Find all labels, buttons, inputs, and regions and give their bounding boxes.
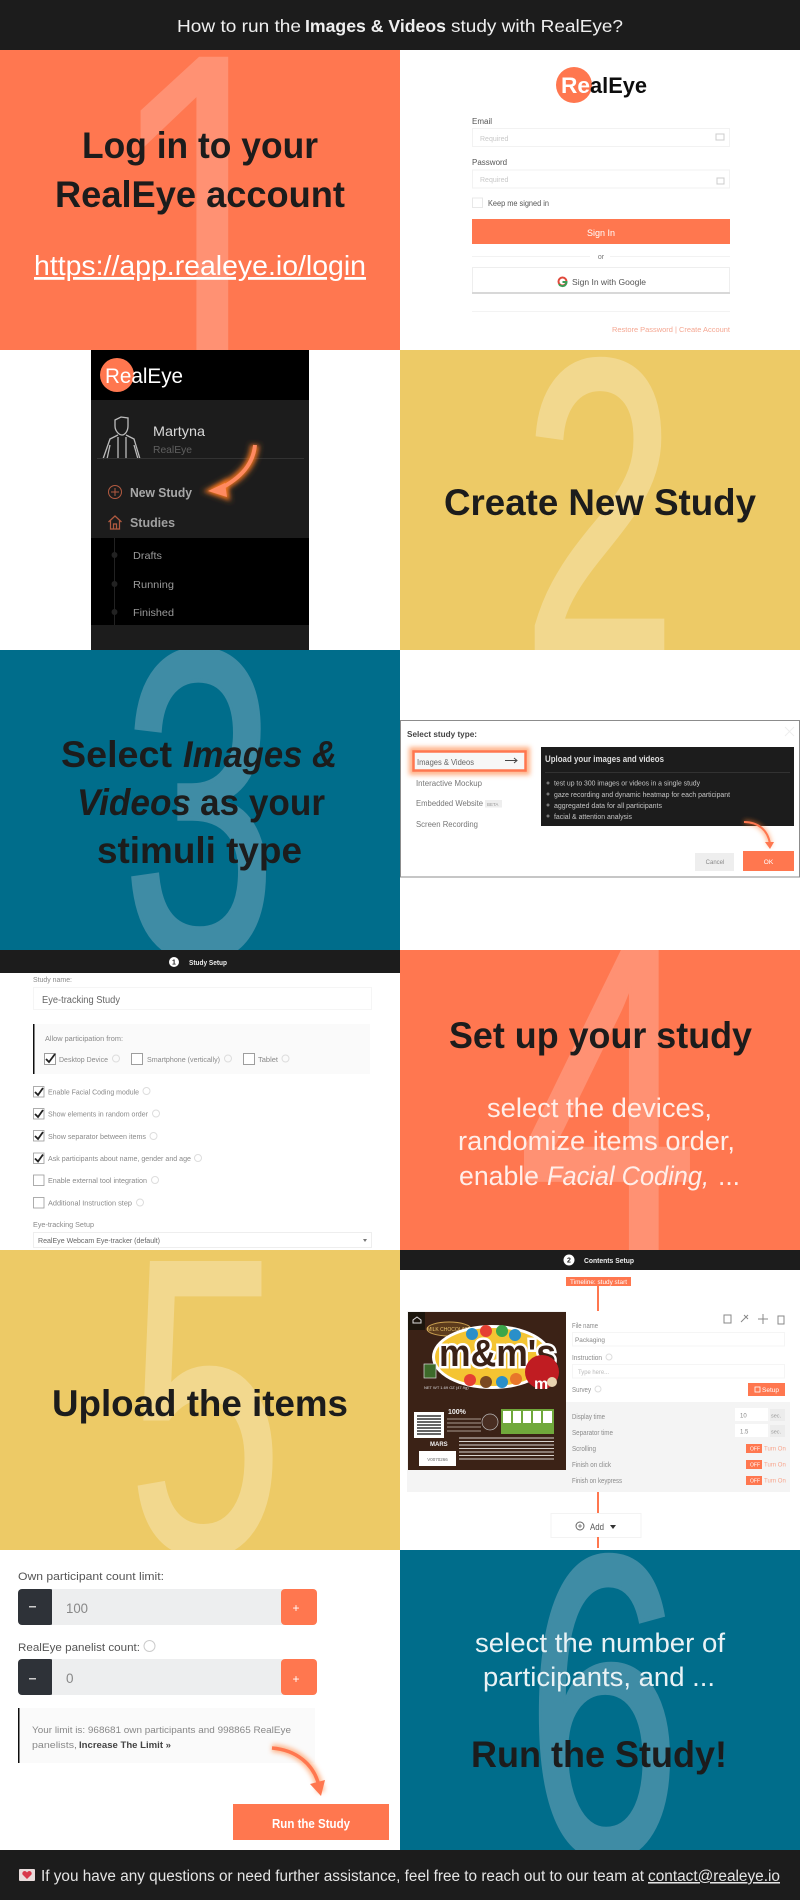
contents bar: Contents Setup [584, 1256, 634, 1265]
panel: step 2 create new study [400, 350, 800, 650]
modal [400, 720, 800, 877]
header bar [0, 0, 800, 50]
packaging image: MARS [430, 1442, 448, 1448]
file name field: File name [572, 1323, 598, 1330]
setup description: ... [718, 1161, 740, 1191]
device options [33, 1024, 370, 1074]
checkbox list: Show elements in random order [48, 1112, 149, 1118]
run button [233, 1804, 389, 1840]
study name field: Eye-tracking Study [42, 995, 120, 1006]
study name field: Study name: [33, 977, 72, 984]
file name field: Packaging [575, 1337, 605, 1344]
timing settings: Scrolling [572, 1446, 596, 1453]
setup bar: Study Setup [189, 960, 227, 967]
contact text: If you have any questions or need further assistance, feel free to reach out to our team at [41, 1868, 645, 1885]
setup description: enable [459, 1161, 539, 1191]
toggle switches: Turn On [764, 1446, 786, 1452]
checkbox list: Enable external tool integration [48, 1178, 147, 1185]
panelist stepper [18, 1640, 317, 1695]
description box: aggregated data for all participants [554, 803, 662, 810]
own participant stepper: Own participant count limit: [18, 1571, 164, 1583]
toggle switches: OFF [750, 1446, 760, 1452]
option: images and videos highlighted [412, 750, 527, 772]
timeline tag: Timeline: study start [570, 1280, 627, 1286]
arrow: to ok button [744, 822, 774, 849]
heading: select images and videos: Images & [183, 734, 337, 775]
google button [472, 268, 730, 294]
timing settings: Display time [572, 1414, 605, 1421]
sign in button [472, 219, 730, 244]
survey setup [572, 1383, 785, 1396]
RealEye logo [556, 67, 647, 103]
icon: love letter [19, 1869, 35, 1881]
heading: select images and videos: Videos [77, 782, 191, 823]
option list: Screen Recording [416, 820, 478, 829]
panel: participant count screenshot [0, 1550, 400, 1850]
menu: sub items [112, 538, 174, 625]
icon: user avatar [103, 417, 140, 459]
panel: contents setup screenshot [400, 1250, 800, 1550]
survey setup: Setup [762, 1387, 779, 1394]
panel: new study screenshot [0, 350, 400, 650]
description box: Upload your images and videos [545, 754, 664, 764]
option: images and videos highlighted: Images & Videos [417, 758, 474, 767]
account links: Restore Password | Create Account [612, 325, 731, 334]
device options: Desktop Device [59, 1057, 108, 1064]
heading: select images and videos: Select [61, 734, 172, 775]
packaging image [408, 1312, 566, 1470]
packaging image: m [534, 1376, 548, 1393]
big number 2: 2 [522, 273, 677, 742]
cancel button [695, 853, 734, 871]
panel: study setup screenshot [0, 950, 400, 1250]
study name field [33, 977, 372, 1010]
keep signed in [472, 198, 549, 208]
device options: Tablet [258, 1057, 278, 1064]
setup description: Facial Coding, [547, 1161, 709, 1191]
option list: Interactive Mockup [416, 779, 483, 788]
setup description [458, 1093, 740, 1191]
limit note [18, 1708, 315, 1763]
contact email: contact@realeye.io [648, 1868, 780, 1885]
timing settings: 1.5 [740, 1430, 749, 1436]
panel: login screenshot [400, 50, 800, 350]
nutrition panel [501, 1409, 554, 1434]
RealEye logo: alEye [590, 73, 647, 98]
heading: upload the items: Upload the items [52, 1383, 348, 1424]
barcode [414, 1412, 444, 1438]
heading: log in: Log in to your [82, 125, 318, 166]
sidebar: RealEye [153, 444, 192, 456]
ok button [743, 851, 794, 871]
modal title: Select study type: [407, 729, 477, 739]
own participant stepper: + [292, 1601, 300, 1615]
description box: facial & attention analysis [554, 814, 632, 821]
keep signed in: Keep me signed in [488, 199, 549, 208]
option list: BETA [487, 802, 498, 807]
footer bar [0, 1850, 800, 1900]
timing settings: sec. [771, 1430, 782, 1436]
own participant stepper [18, 1571, 317, 1625]
timeline tag [566, 1277, 631, 1311]
title [177, 16, 623, 36]
packaging image: MILK CHOCOLATE [427, 1327, 472, 1333]
timing settings: sec. [771, 1414, 782, 1420]
timing settings: Finish on keypress [572, 1478, 622, 1485]
toggle switches: Turn On [764, 1478, 786, 1484]
menu: studies [108, 516, 175, 530]
limit note: Increase The Limit » [79, 1740, 171, 1751]
checkbox list: Additional Instruction step [48, 1200, 132, 1208]
setup bar [0, 950, 400, 973]
login link: https://app.realeye.io/login [34, 250, 366, 281]
option list: Embedded Website [416, 799, 484, 808]
checkbox list: Enable Facial Coding module [48, 1090, 139, 1096]
limit note: Your limit is: 968681 own participants and 998865 RealEye [32, 1725, 291, 1736]
sidebar logo: RealEye [105, 365, 183, 388]
toolbar icons [724, 1314, 784, 1324]
google button: Sign In with Google [572, 277, 646, 287]
email field: Email [472, 117, 492, 126]
eye tracking setup select: RealEye Webcam Eye-tracker (default) [38, 1238, 160, 1245]
arrow: to run button [272, 1748, 325, 1796]
menu: sub items: Finished [133, 607, 174, 619]
heading: run the study: Run the Study! [471, 1734, 727, 1775]
device options: Smartphone (vertically) [147, 1057, 220, 1064]
participants description: participants, and ... [483, 1662, 715, 1692]
heading: log in [55, 125, 345, 215]
description box: test up to 300 images or videos in a single study [554, 780, 700, 788]
title: study with RealEye? [451, 16, 623, 36]
toggle switches: OFF [750, 1478, 760, 1484]
contents bar: 2 [567, 1258, 571, 1264]
menu: studies: Studies [130, 516, 175, 530]
sidebar logo [100, 358, 183, 392]
timing settings: Finish on click [572, 1462, 611, 1469]
heading: log in: RealEye account [55, 174, 345, 215]
big number 4: 4 [518, 844, 698, 1346]
checkbox list: Ask participants about name, gender and age [48, 1156, 191, 1163]
panel: step 5 upload items [0, 1250, 400, 1550]
timing settings: 10 [740, 1414, 747, 1420]
run button: Run the Study [272, 1816, 351, 1831]
ok button: OK [764, 859, 774, 866]
checkbox list: Show separator between items [48, 1134, 147, 1141]
option list [416, 779, 502, 829]
panelist stepper: + [292, 1672, 300, 1686]
survey setup: Survey [572, 1387, 591, 1394]
heading: create new study: Create New Study [444, 482, 756, 523]
description box: gaze recording and dynamic heatmap for each participant [554, 792, 730, 799]
participants description [475, 1628, 726, 1692]
menu: sub items: Running [133, 579, 174, 591]
heading: set up your study: Set up your study [449, 1015, 752, 1056]
instruction field: Type here... [578, 1370, 609, 1376]
setup description: randomize items order, [458, 1126, 735, 1156]
RealEye logo: Re [561, 73, 590, 98]
sidebar [91, 350, 309, 650]
panel: step 6 run the study [400, 1550, 800, 1850]
setup description: select the devices, [487, 1093, 712, 1123]
panel: step 3 select stimuli [0, 650, 400, 950]
instruction field [572, 1354, 784, 1378]
limit note: panelists, [32, 1740, 77, 1751]
big number 3: 3 [122, 559, 277, 1050]
menu: sub items: Drafts [133, 550, 162, 562]
eye tracking setup select: Eye-tracking Setup [33, 1222, 94, 1229]
toggle switches: OFF [750, 1462, 760, 1468]
divider or: or [598, 254, 605, 261]
email field: Required [480, 136, 509, 143]
eye tracking setup select [33, 1222, 372, 1248]
device options: Allow participation from: [45, 1036, 123, 1043]
packaging image: NET WT 1.69 OZ (47.9g) [424, 1385, 469, 1390]
password field: Required [480, 177, 509, 184]
toggle switches [746, 1444, 786, 1485]
panel: select study type screenshot [400, 650, 800, 950]
title: How to run the [177, 16, 301, 36]
timing settings [572, 1408, 785, 1485]
email field [472, 117, 730, 146]
description box [541, 747, 794, 826]
password field [472, 158, 730, 188]
add button: Add [590, 1522, 604, 1532]
title: Images & Videos [305, 16, 446, 36]
packaging image: V0070266 [427, 1457, 448, 1462]
password field: Password [472, 158, 507, 167]
sign in button: Sign In [587, 228, 615, 238]
heading: select images and videos: as your [200, 782, 325, 823]
toggle switches: Turn On [764, 1462, 786, 1468]
checkbox list [34, 1086, 202, 1208]
own participant stepper: 100 [66, 1601, 88, 1616]
instruction field: Instruction [572, 1355, 602, 1362]
heading: select images and videos: stimuli type [97, 830, 302, 871]
file name field [572, 1323, 784, 1346]
packaging image: m&m's [439, 1333, 556, 1375]
panelist stepper: 0 [66, 1671, 74, 1686]
big number 5: 5 [128, 1173, 283, 1642]
participants description: select the number of [475, 1628, 726, 1658]
packaging image: 100% [448, 1409, 467, 1416]
user name: Martyna [153, 423, 205, 439]
heading: select images and videos [61, 734, 337, 871]
menu: new study: New Study [130, 486, 192, 500]
panel: step 1 log in [0, 50, 400, 350]
cancel button: Cancel [706, 860, 724, 866]
add button [551, 1514, 641, 1538]
panelist stepper: RealEye panelist count: [18, 1642, 140, 1654]
contents bar [400, 1250, 800, 1270]
arrow: to new study [208, 445, 255, 498]
timing settings: Separator time [572, 1430, 613, 1437]
panel: step 4 set up study [400, 950, 800, 1250]
item card [407, 1311, 790, 1492]
setup bar: 1 [172, 960, 176, 966]
